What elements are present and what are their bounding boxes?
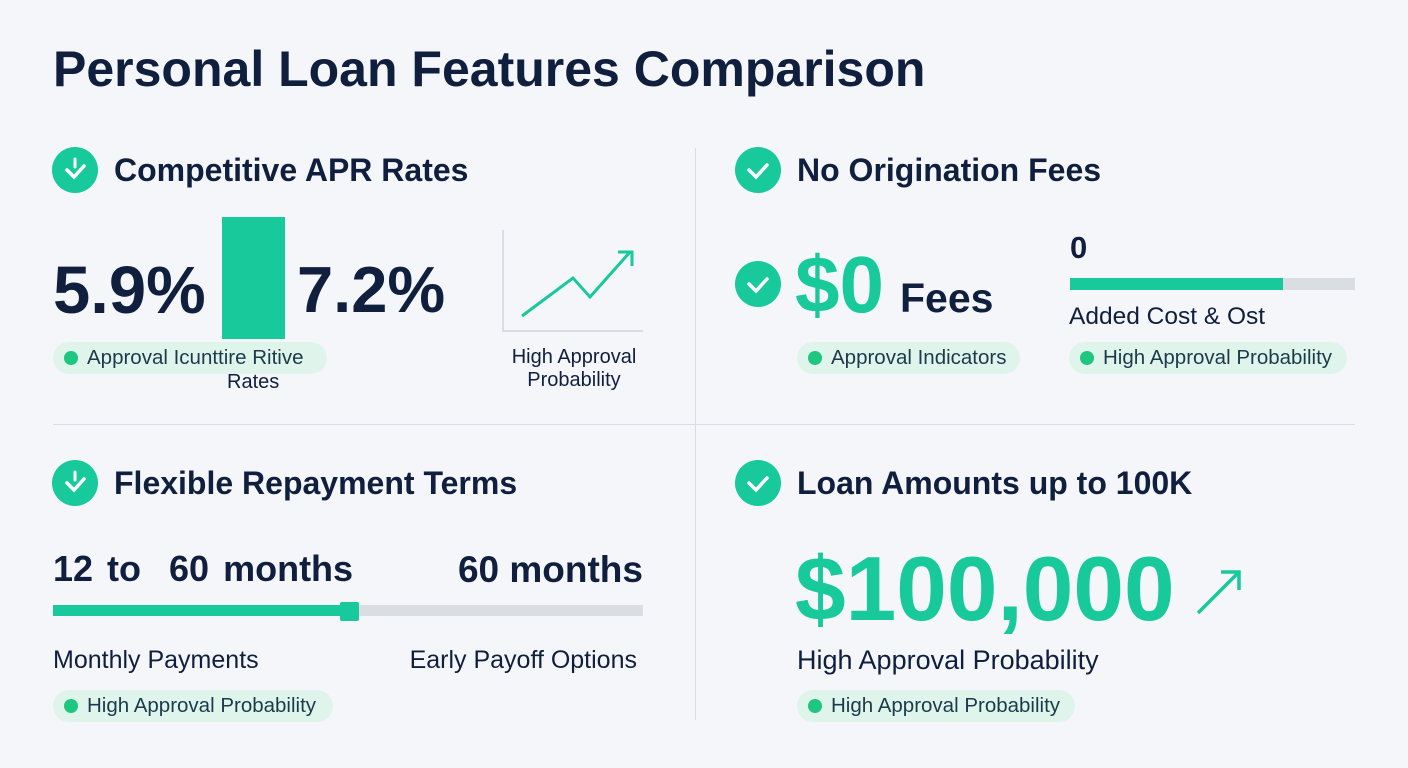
chart label: High Approval [512,346,636,368]
heading: Competitive APR Rates [114,152,468,188]
label: High Approval Probability [797,645,1099,675]
panel: flexible terms [52,460,643,722]
heading: Flexible Repayment Terms [114,465,517,501]
amount: $100,000 [795,539,1175,640]
pill [797,690,1075,722]
title: Personal Loan Features Comparison [53,41,925,97]
label: Early Payoff Options [410,646,637,674]
cost bar [1070,278,1355,290]
rate 5.9: 5.9% [53,253,206,328]
range: 12 to 60 months [53,548,353,589]
$0 fees: $0 Fees [795,240,993,329]
pill: High Approval Probability [87,694,316,717]
pill: Approval Indicators [831,346,1006,369]
pill [797,342,1020,374]
icon: check [735,460,781,506]
panel: loan amounts [735,460,1241,722]
icon: check [735,261,781,307]
bar [222,217,285,339]
line chart [502,230,643,332]
rate 7.2: 7.2% [297,253,445,326]
zero: 0 [1070,230,1087,265]
rates label: Rates [227,371,279,393]
max: 60 months [458,549,643,590]
icon: check down [52,147,98,193]
pill [1069,342,1347,374]
chart label [512,346,636,391]
panel: no origination fees [735,147,1355,374]
pill [53,690,333,722]
chart label: Probability [527,369,621,391]
icon: check [735,147,781,193]
pill: High Approval Probability [1103,346,1332,369]
slider [53,605,643,616]
pill: Approval Icunttire Ritive [87,346,303,369]
pill [53,342,327,374]
label: Monthly Payments [53,646,259,674]
pill: High Approval Probability [831,694,1060,717]
icon: check down [52,460,98,506]
arrow [1196,570,1241,614]
heading: No Origination Fees [797,152,1101,188]
cost label: Added Cost & Ost [1069,303,1265,330]
heading: Loan Amounts up to 100K [797,465,1192,501]
panel: competitive APR [52,147,643,393]
